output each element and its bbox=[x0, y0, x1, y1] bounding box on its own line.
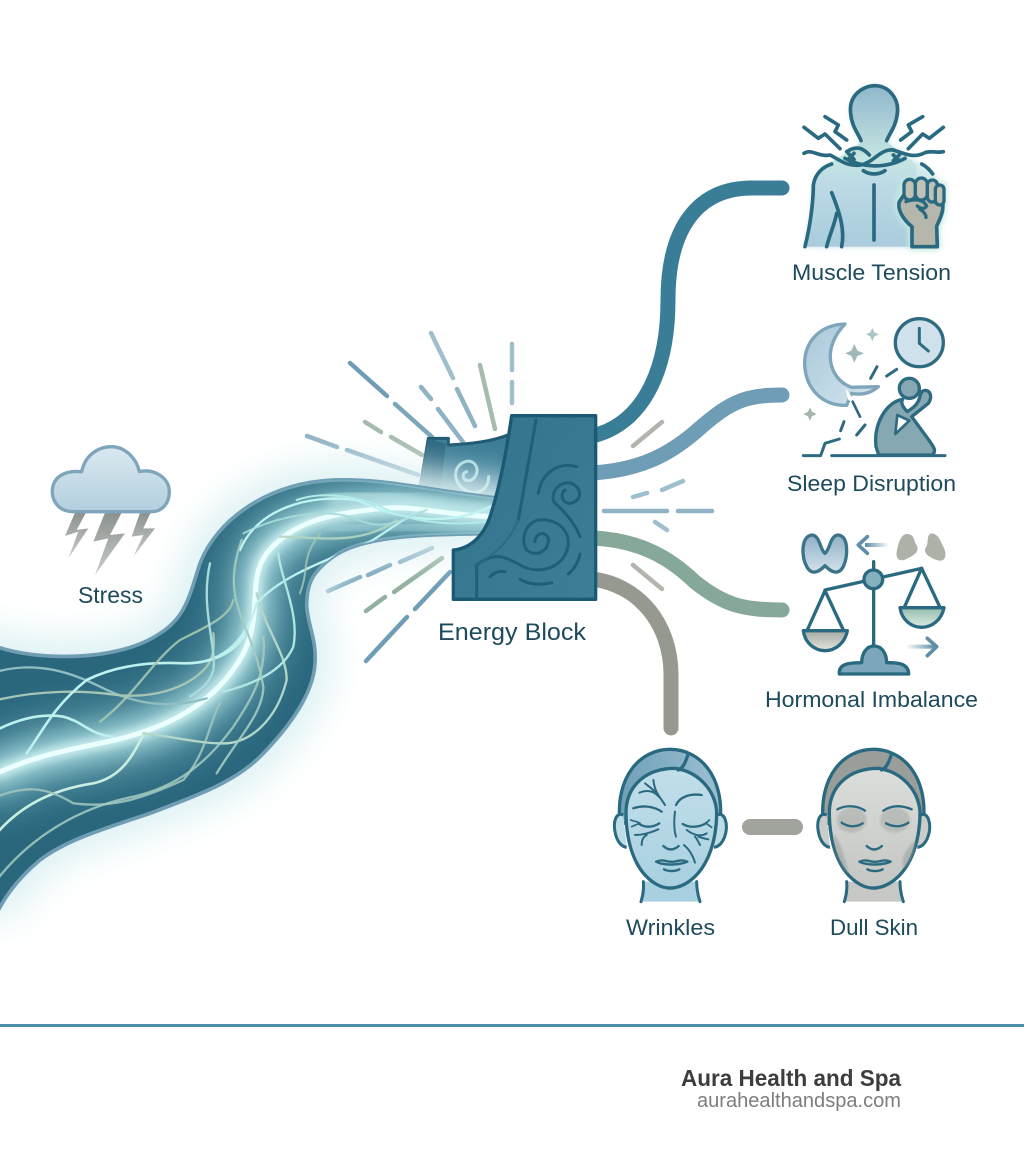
icon: scale with thyroid and adrenal glands bbox=[803, 533, 945, 674]
energy burst rays bbox=[307, 333, 712, 661]
energy block: back piece bbox=[418, 433, 512, 497]
sleep disruption group bbox=[787, 319, 956, 496]
icon: tense shoulders and fist bbox=[804, 86, 944, 247]
connector: skin bbox=[592, 579, 671, 728]
wrinkles label: Wrinkles bbox=[626, 915, 715, 940]
hormonal imbalance label: Hormonal Imbalance bbox=[765, 687, 978, 712]
energy block: front bbox=[453, 416, 596, 599]
stress label: Stress bbox=[78, 582, 143, 608]
brand name: Aura Health and Spa bbox=[681, 1065, 901, 1091]
brand website: aurahealthandspa.com bbox=[697, 1089, 901, 1112]
connector: muscle tension bbox=[592, 188, 782, 436]
dull skin label: Dull Skin bbox=[830, 915, 918, 940]
dash between faces bbox=[742, 819, 803, 835]
stress energy river bbox=[0, 480, 500, 913]
muscle tension group bbox=[792, 86, 951, 285]
icon: storm cloud bbox=[52, 447, 169, 575]
hormonal imbalance group bbox=[765, 533, 978, 712]
icon: dull face bbox=[818, 749, 930, 902]
footer brand bbox=[681, 1065, 901, 1112]
connector: hormonal imbalance bbox=[592, 538, 782, 610]
footer divider bbox=[0, 1024, 1024, 1027]
stress cloud group bbox=[52, 447, 169, 608]
muscle tension label: Muscle Tension bbox=[792, 260, 951, 285]
dull skin group bbox=[818, 749, 930, 940]
wrinkles group bbox=[614, 749, 726, 940]
sleep disruption label: Sleep Disruption bbox=[787, 471, 956, 496]
icon: moon clock and sitting person bbox=[803, 319, 945, 456]
connector: sleep disruption bbox=[592, 395, 782, 473]
icon: wrinkled face bbox=[614, 749, 726, 902]
energy block label: Energy Block bbox=[438, 619, 587, 646]
